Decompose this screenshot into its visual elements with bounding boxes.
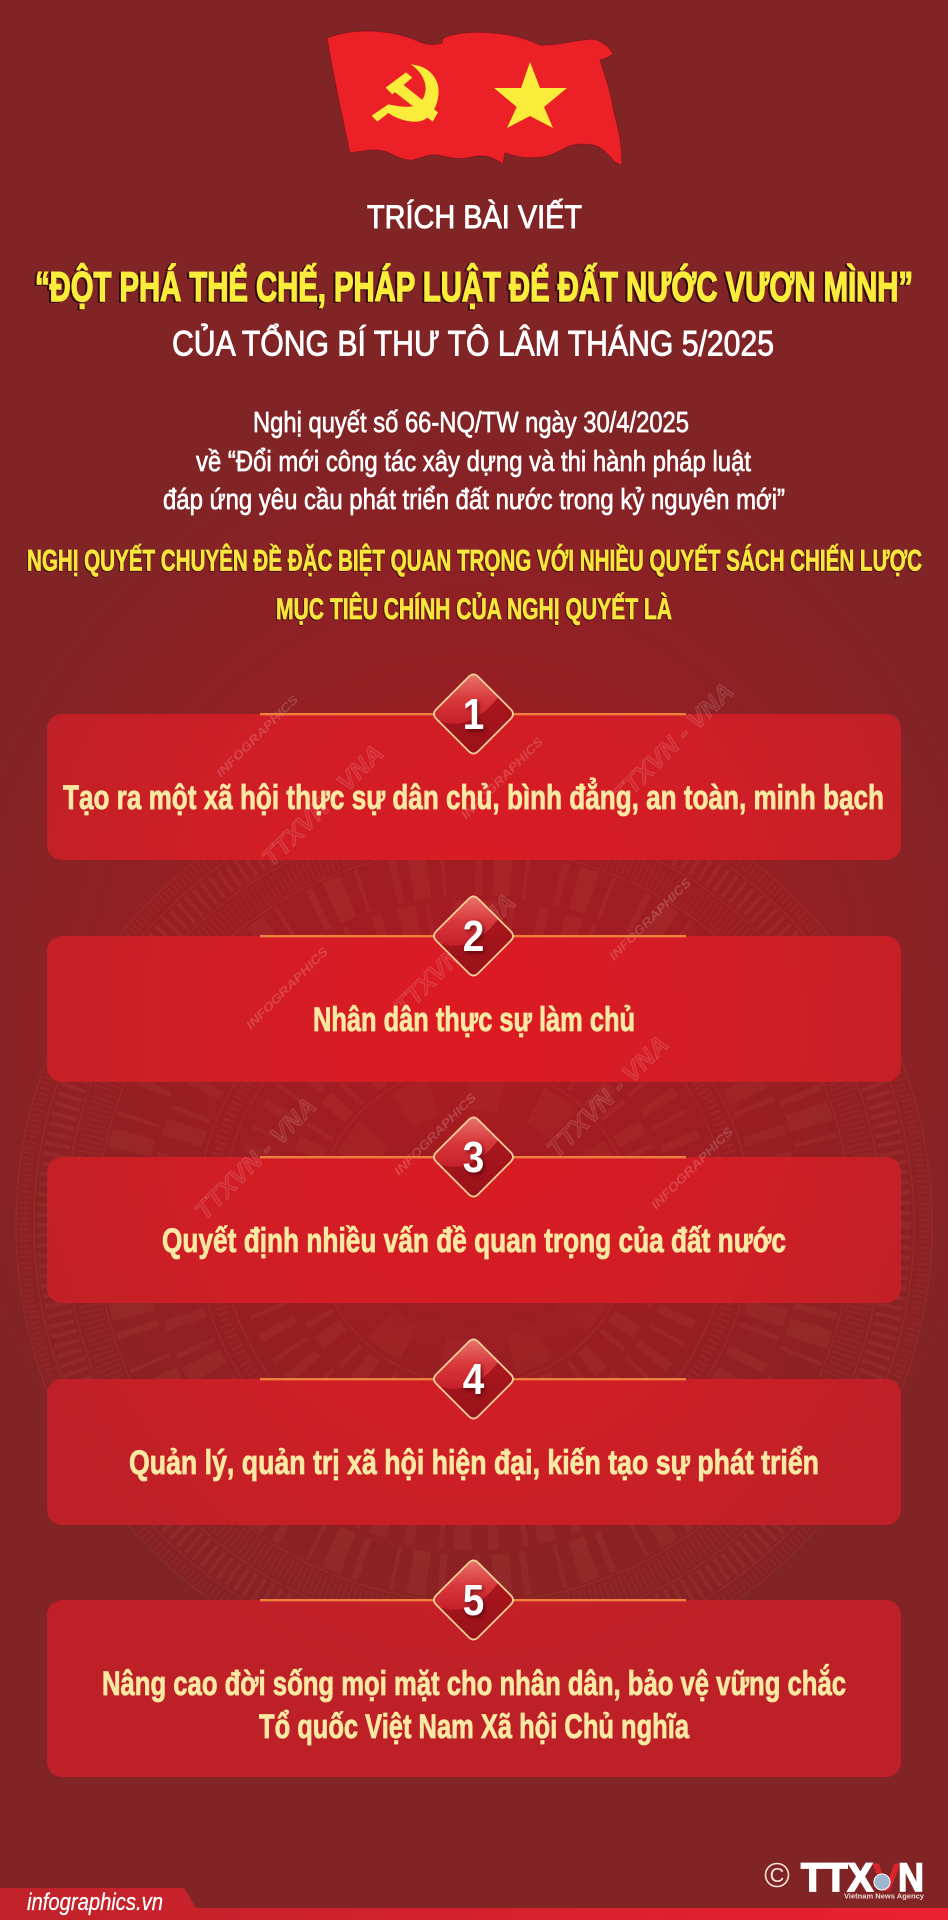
badge 4 diamond bbox=[430, 1333, 513, 1418]
footer site name: infographics.vn bbox=[27, 1889, 163, 1916]
badge 2 diamond bbox=[430, 890, 513, 976]
goal 3 text: Quyết định nhiều vấn đề quan trọng của đất nước bbox=[162, 1222, 786, 1260]
logo tagline: Vietnam News Agency bbox=[844, 1894, 924, 1900]
divider and badge: 5 bbox=[260, 1554, 686, 1640]
text block: resolution description: về “Đổi mới công tác xây dựng và thi hành pháp luật bbox=[196, 446, 751, 478]
logo N: N bbox=[898, 1856, 924, 1900]
watermarks: INFOGRAPHICS bbox=[458, 734, 546, 822]
panel: goal 1 bbox=[47, 714, 901, 860]
watermarks: TTXVN - VNA bbox=[388, 888, 521, 1021]
watermarks bbox=[189, 677, 739, 1225]
watermarks: INFOGRAPHICS bbox=[606, 875, 694, 963]
watermarks: INFOGRAPHICS bbox=[213, 692, 301, 780]
divider and badge: 1 bbox=[260, 668, 686, 754]
divider and badge: 2 bbox=[260, 890, 686, 976]
text block: resolution description bbox=[163, 407, 785, 516]
text block: yellow subheading: MỤC TIÊU CHÍNH CỦA NGHỊ QUYẾT LÀ bbox=[276, 592, 672, 626]
heading: author and date: CỦA TỔNG BÍ THƯ TÔ LÂM THÁNG 5/2025 bbox=[172, 324, 774, 364]
panel: goal 3 bbox=[47, 1157, 901, 1303]
icon: star bbox=[494, 62, 567, 128]
logo globe bbox=[874, 1874, 890, 1890]
divider and badge: 4 bbox=[260, 1333, 686, 1418]
footer bar bbox=[0, 1888, 948, 1920]
watermarks: TTXVN - VNA bbox=[541, 1030, 674, 1163]
text block: resolution description: Nghị quyết số 66-NQ/TW ngày 30/4/2025 bbox=[253, 407, 689, 439]
watermarks: INFOGRAPHICS bbox=[648, 1124, 736, 1212]
goal 2 text: Nhân dân thực sự làm chủ bbox=[313, 1001, 635, 1039]
icon: hammer and sickle bbox=[372, 64, 439, 122]
heading: excerpt label: TRÍCH BÀI VIẾT bbox=[367, 199, 582, 235]
badge 5 diamond bbox=[430, 1554, 513, 1640]
badge 4 diamond: 4 bbox=[463, 1354, 484, 1404]
text block: resolution description: đáp ứng yêu cầu phát triển đất nước trong kỷ nguyên mới” bbox=[163, 484, 785, 516]
icon: copyright: C bbox=[770, 1865, 784, 1887]
badge 1 diamond bbox=[430, 668, 513, 754]
watermarks: TTXVN - VNA bbox=[256, 739, 389, 872]
text block: yellow subheading bbox=[27, 544, 922, 626]
logo wordmark: TTX bbox=[801, 1856, 873, 1900]
panel: goal 5 bbox=[47, 1600, 901, 1777]
logo: TTXVN bbox=[766, 1856, 924, 1900]
logo red V: V bbox=[872, 1856, 901, 1900]
icon: copyright bbox=[766, 1864, 788, 1887]
badge 3 diamond bbox=[430, 1111, 513, 1196]
badge 3 diamond: 3 bbox=[463, 1132, 484, 1182]
badge 1 diamond: 1 bbox=[463, 689, 484, 739]
goal 5 text: Tổ quốc Việt Nam Xã hội Chủ nghĩa bbox=[259, 1708, 690, 1746]
panel: goal 2 bbox=[47, 936, 901, 1082]
panel: goal 4 bbox=[47, 1379, 901, 1525]
flag bbox=[327, 31, 622, 165]
watermarks: INFOGRAPHICS bbox=[391, 1090, 479, 1178]
divider and badge: 3 bbox=[260, 1111, 686, 1196]
badge 5 diamond: 5 bbox=[463, 1575, 484, 1625]
background drum motif bbox=[16, 767, 932, 1683]
watermarks: INFOGRAPHICS bbox=[243, 944, 331, 1032]
watermarks: TTXVN - VNA bbox=[606, 677, 739, 810]
badge 2 diamond: 2 bbox=[463, 911, 484, 961]
watermarks: TTXVN - VNA bbox=[189, 1092, 322, 1225]
goal 5 text bbox=[102, 1665, 846, 1746]
